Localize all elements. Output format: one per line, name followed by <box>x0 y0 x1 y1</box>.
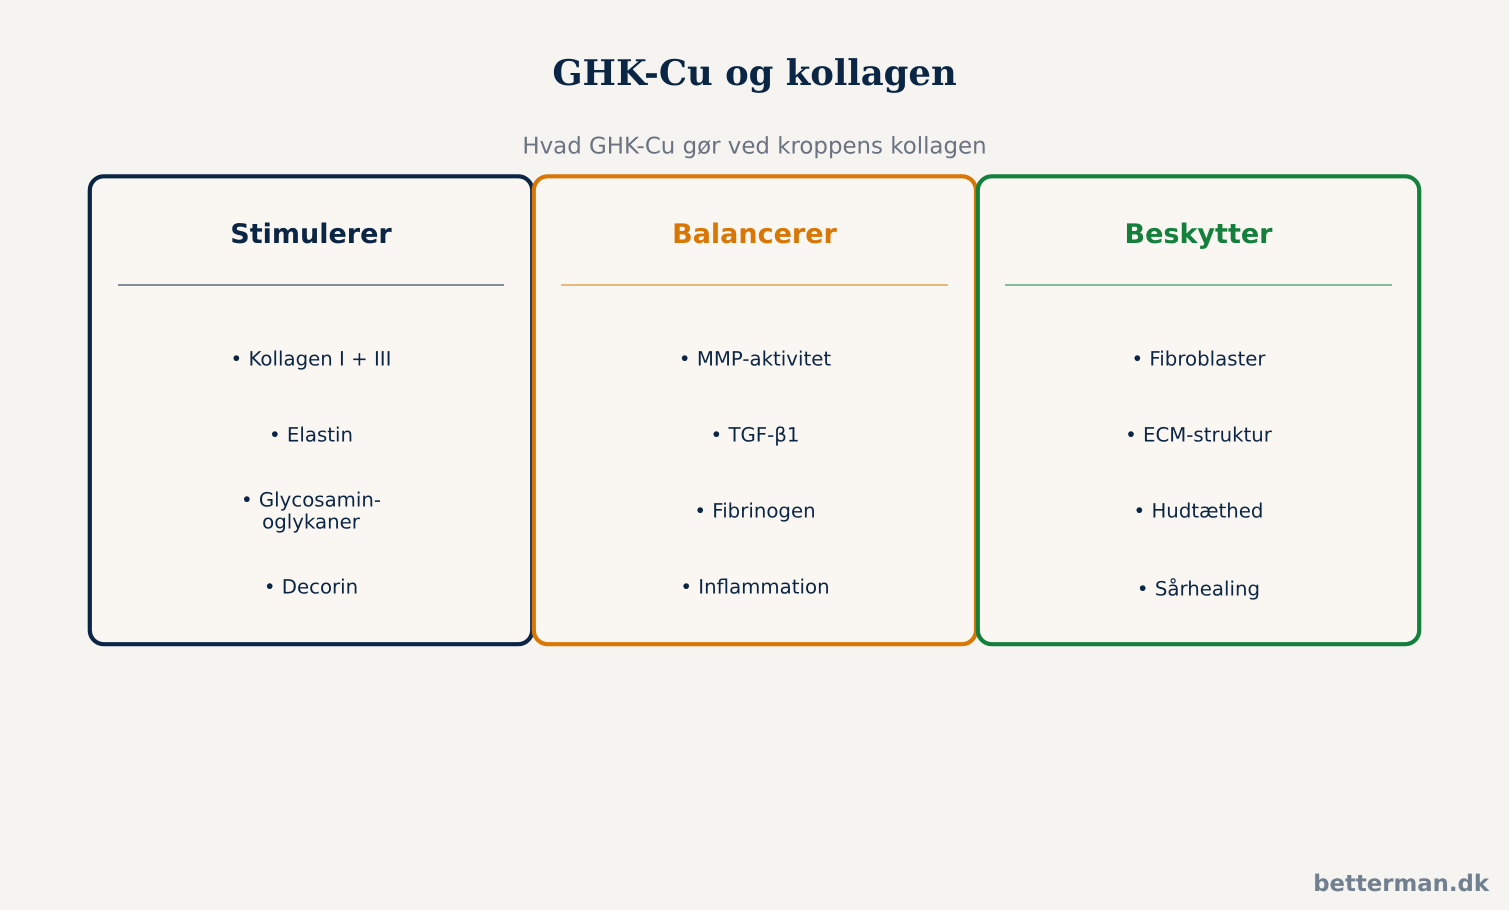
list: Stimulerer items: • Glycosamin- <box>241 488 381 512</box>
subtitle: Hvad GHK-Cu gør ved kroppens kollagen <box>522 134 987 160</box>
list: Stimulerer items <box>231 348 391 598</box>
watermark: betterman.dk <box>1313 871 1490 897</box>
list: Balancerer items: • Fibrinogen <box>694 500 816 522</box>
heading: Stimulerer: Stimulerer <box>230 219 392 250</box>
list: Balancerer items: • Inflammation <box>680 576 830 598</box>
list: Beskytter items: • ECM-struktur <box>1125 424 1273 446</box>
list: Stimulerer items: oglykaner <box>262 510 361 534</box>
panel: Balancerer <box>534 176 976 644</box>
list: Balancerer items: • TGF-β1 <box>711 424 799 446</box>
list: Beskytter items: • Sårhealing <box>1137 578 1260 600</box>
title: GHK-Cu og kollagen <box>552 53 957 94</box>
list: Beskytter items: • Hudtæthed <box>1134 500 1263 522</box>
list: Beskytter items <box>1125 348 1273 600</box>
list: Stimulerer items: • Decorin <box>264 576 358 598</box>
list: Stimulerer items: • Kollagen I + III <box>231 348 391 370</box>
list: Balancerer items: • MMP-aktivitet <box>679 348 831 370</box>
panel: Stimulerer <box>90 176 532 644</box>
heading: Beskytter: Beskytter <box>1125 219 1273 250</box>
panel: Beskytter <box>978 176 1419 644</box>
list: Balancerer items <box>679 348 831 598</box>
list: Beskytter items: • Fibroblaster <box>1131 348 1266 370</box>
list: Stimulerer items: • Elastin <box>269 424 353 446</box>
heading: Balancerer: Balancerer <box>672 219 838 250</box>
